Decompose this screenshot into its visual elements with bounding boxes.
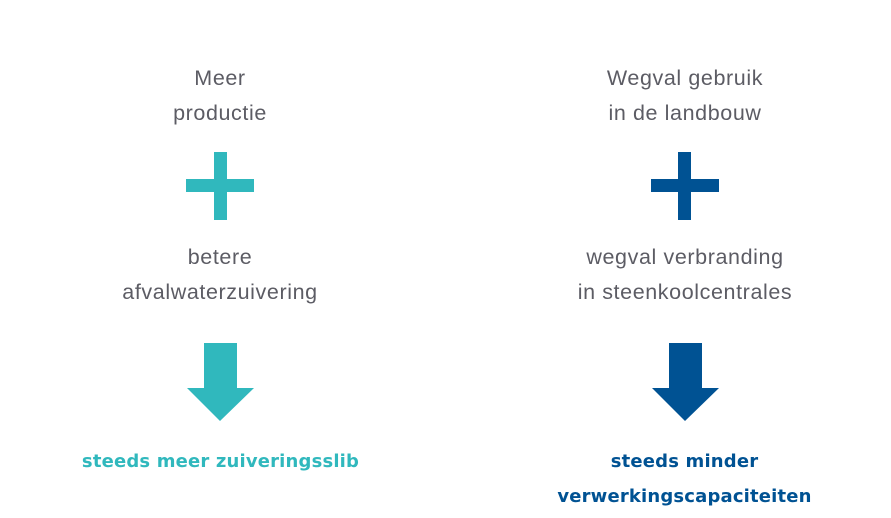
text: wegval verbranding in steenkoolcentrales: wegval verbranding <box>586 245 784 269</box>
text: wegval gebruik in de landbouw <box>607 66 763 125</box>
text: wegval verbranding in steenkoolcentrales <box>578 245 792 304</box>
text: meer productie: Meer <box>194 66 246 90</box>
result: steeds minder verwerkingscapaciteiten: steeds minder <box>611 451 758 472</box>
text: meer productie: productie <box>173 101 267 125</box>
text: betere afvalwaterzuivering: betere <box>188 245 252 269</box>
result: steeds minder verwerkingscapaciteiten <box>557 451 812 507</box>
text: wegval gebruik in de landbouw: in de landbouw <box>608 101 762 125</box>
text: meer productie <box>173 66 267 125</box>
text: wegval gebruik in de landbouw: Wegval gebruik <box>607 66 763 90</box>
text: wegval verbranding in steenkoolcentrales: in steenkoolcentrales <box>578 280 792 304</box>
result: steeds minder verwerkingscapaciteiten: verwerkingscapaciteiten <box>557 486 812 507</box>
text: betere afvalwaterzuivering <box>122 245 318 304</box>
result: steeds meer zuiveringsslib: steeds meer zuiveringsslib <box>82 451 359 472</box>
text: betere afvalwaterzuivering: afvalwaterzuivering <box>122 280 318 304</box>
